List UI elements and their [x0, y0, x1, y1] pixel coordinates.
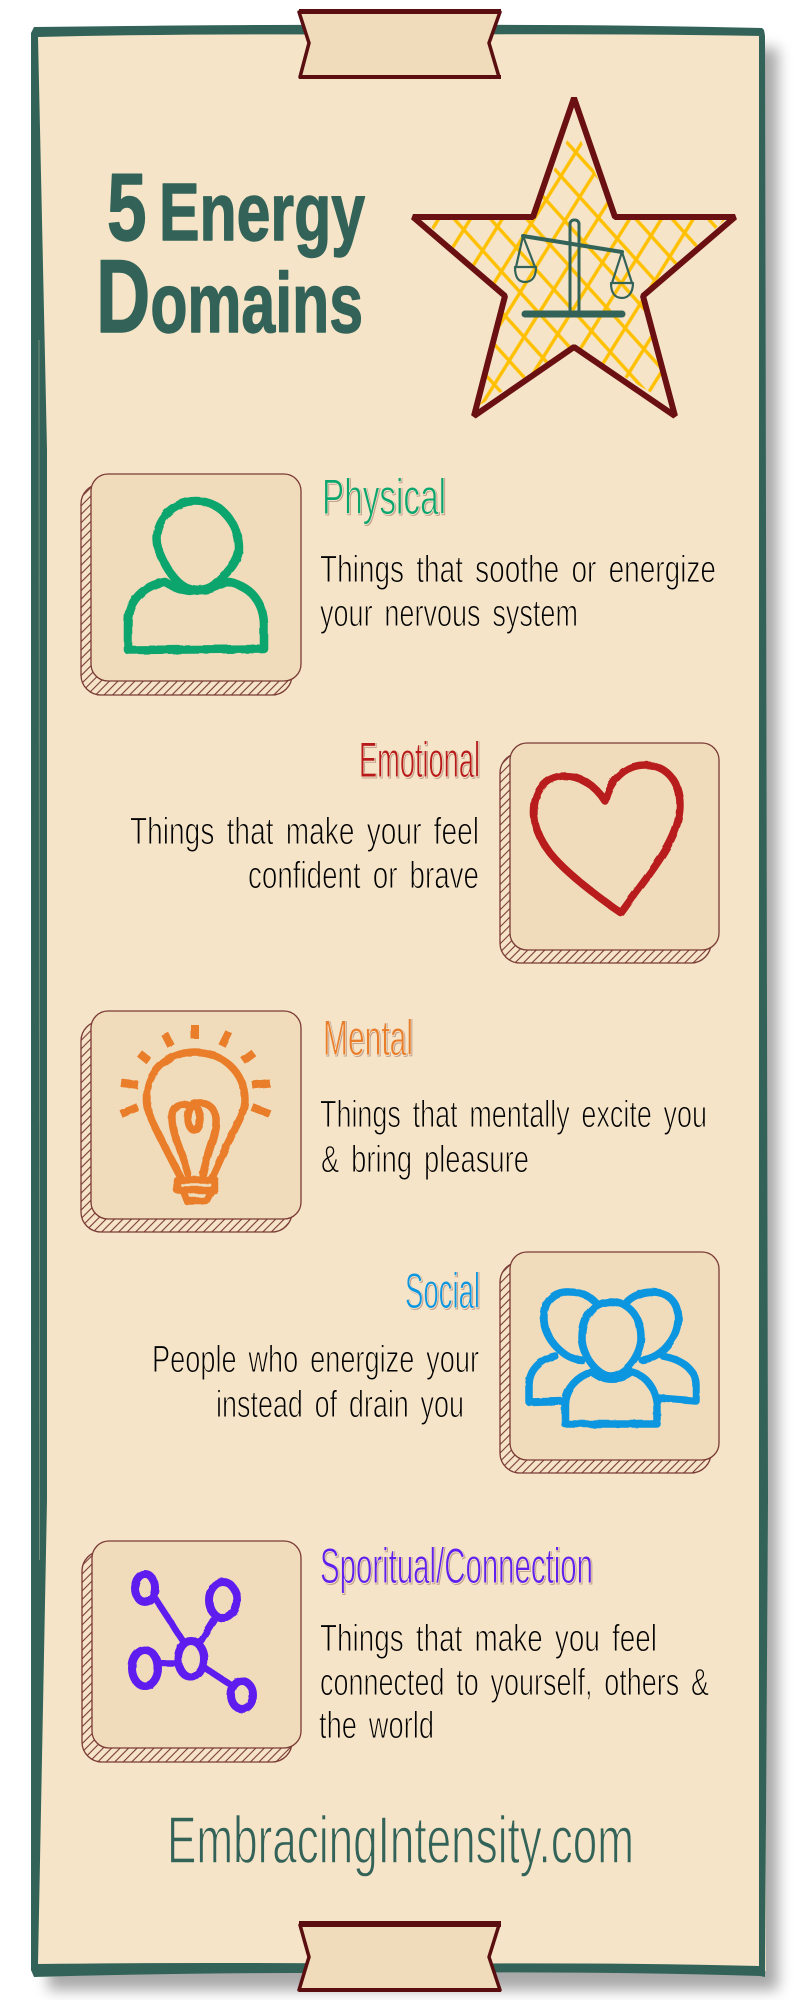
- heading: Mental: [323, 1010, 413, 1066]
- text block: confident or brave: [248, 855, 479, 897]
- card: [82, 1541, 301, 1762]
- icon: network: [132, 1574, 253, 1709]
- text block: instead of drain you: [216, 1384, 464, 1426]
- heading: Sporitual/Connection: [320, 1538, 593, 1594]
- icon: group of people: [529, 1292, 696, 1424]
- text block: [320, 549, 716, 635]
- panel: mental: [81, 1010, 707, 1232]
- text block: [152, 1339, 479, 1426]
- icon: person: [128, 501, 264, 650]
- heading: Social: [405, 1263, 480, 1319]
- card: [81, 474, 301, 695]
- text block: [319, 1618, 709, 1747]
- panel: physical: [81, 469, 716, 695]
- panel: spiritual: [82, 1538, 709, 1762]
- title: 5 Energy: [107, 154, 365, 261]
- card: [500, 743, 719, 963]
- text block: Things that make your feel: [130, 811, 479, 853]
- icon: light bulb: [121, 1025, 270, 1201]
- icon: heart: [534, 765, 680, 913]
- star with lattice and scales: [405, 90, 745, 425]
- heading: Physical: [322, 469, 446, 525]
- text block: the world: [319, 1705, 434, 1747]
- text block: & bring pleasure: [321, 1139, 529, 1181]
- heading: Emotional: [359, 732, 480, 788]
- star outline: [413, 98, 735, 416]
- left border sliver: [38, 340, 40, 1560]
- bottom ribbon tab: [299, 1921, 501, 1992]
- panel: social: [152, 1252, 719, 1473]
- title: [96, 154, 365, 355]
- text block: Things that make you feel: [320, 1618, 657, 1660]
- panel: emotional: [130, 732, 719, 963]
- icon: balance scales: [515, 220, 633, 314]
- top ribbon tab: [299, 9, 501, 79]
- text block: [320, 1094, 707, 1181]
- text block: People who energize your: [152, 1339, 479, 1381]
- star lattice: [431, 140, 725, 405]
- card: [500, 1252, 719, 1473]
- text block: [130, 811, 479, 897]
- card: [81, 1011, 301, 1232]
- text block: your nervous system: [320, 593, 578, 635]
- title: Domains: [96, 239, 363, 355]
